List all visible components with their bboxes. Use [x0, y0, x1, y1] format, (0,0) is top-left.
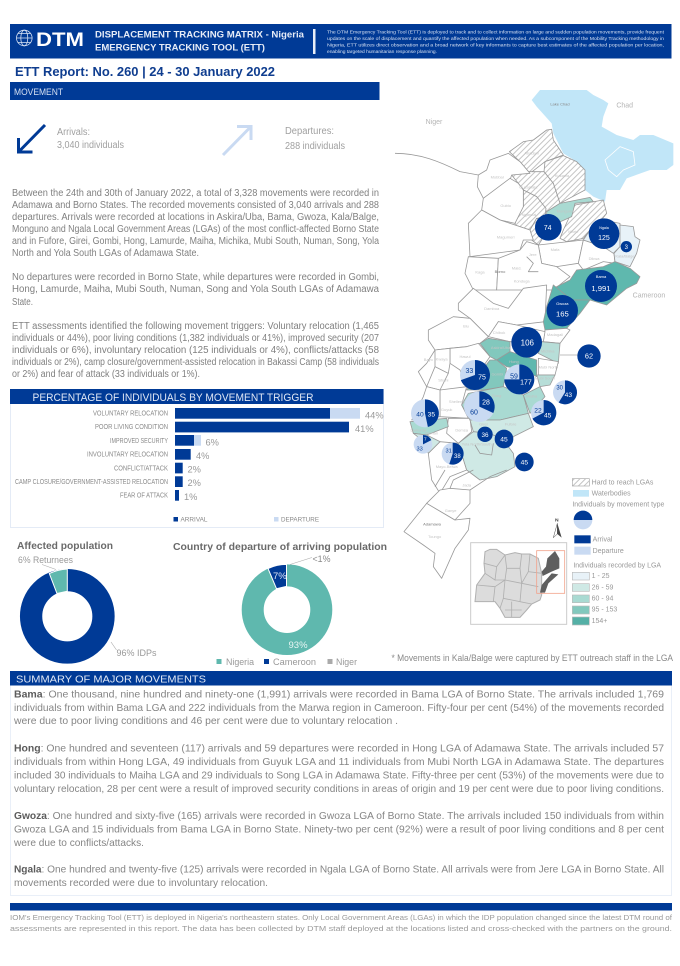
text block: departures: Hong, Lamurde, Maiha, Mubi South, Numan, Song and Yola South LGAs of Adamawa [12, 284, 380, 295]
map legend: Individuals recorded by LGA [573, 563, 661, 570]
map: central and southern LGAs [410, 262, 640, 493]
pie: Gombi [460, 360, 490, 390]
map labels: place names: Niger [426, 119, 443, 126]
panel: country of departure donut: <1% [312, 554, 331, 565]
text block: Hong: voluntary relocation, 28 per cent were a result of improved security conditions in areas of origin and 19 per cent were due to poor living conditions. [14, 784, 664, 795]
map labels: place names: Jada [462, 482, 472, 487]
circle: Girei: 36 [481, 432, 489, 439]
text block: triggers: individuals or 44%), poor living conditions (1,382 individuals or 41%), improved security (207 [12, 333, 379, 344]
pie: Numan: 7 [424, 437, 427, 442]
map labels: place names: Yola North/South [462, 441, 492, 446]
pie: Numan: 33 [417, 447, 423, 453]
circle: Yola South: 45 [521, 460, 528, 467]
text block: Bama: Bama: One thousand, nine hundred and ninety-one (1,991) arrivals were recorded in Bama LGA of Borno State. The arrivals included 1,769 [14, 690, 664, 700]
legend: departure: Departure [593, 548, 624, 555]
legend: LGA classes: 60 - 94 [592, 596, 614, 603]
text block: departures: State. [12, 297, 33, 308]
section bar: movement [10, 82, 380, 100]
circle: Ngala: 125 [598, 235, 610, 242]
panel: summary of major movements [10, 671, 672, 896]
text block: overview: Between the 24th and 30th of January 2022, a total of 3,328 movements were recorded in [12, 188, 379, 199]
pie: Yola: 31 [446, 449, 452, 455]
circle: Ngala [589, 218, 619, 249]
map labels: place names: Kala/Balge [615, 254, 635, 259]
panel: affected population donut: 96% IDPs [116, 648, 157, 659]
text block: Hong: included 30 individuals to Maiha LGA and 29 individuals to Song LGA in Adamawa State. Fifty-three per cent (53%) of the movements were due to [14, 770, 664, 782]
icon: north arrow [553, 518, 562, 538]
legend: LGA classes: 95 - 153 [592, 607, 617, 614]
panel: affected population donut: 6% Returnees [18, 555, 73, 566]
pie: Gombi: 75 [478, 375, 486, 382]
circle: Damasak area 74: 74 [544, 225, 552, 232]
text block: Gwoza: were due to conflicts/attacks. [13, 838, 144, 849]
bar chart: 44% [365, 410, 384, 420]
chart heading: PERCENTAGE OF INDIVIDUALS BY MOVEMENT TRIGGER [32, 392, 314, 404]
pie: Song [464, 391, 495, 422]
text block: overview: Monguno and Ngala Local Government Areas (LGAs) of the most conflict-affected Borno State [12, 224, 379, 235]
icon: IOM logo [16, 30, 32, 46]
map labels: place names: Abadam [524, 150, 540, 155]
map labels: place names: Dikwa [589, 256, 600, 261]
panel: affected population donut: Affected population [17, 541, 113, 552]
pie: Lamurde: 40 [416, 411, 424, 418]
text block: Hong: individuals from within Hong LGA, 49 individuals from Guyuk LGA and 11 individuals from Mubi North LGA in Adamawa State. The departures [14, 757, 664, 768]
map labels: place names: Toungo [428, 534, 442, 539]
bar chart: FEAR OF ATTACK [120, 492, 168, 500]
donut legend: Nigeria [226, 657, 255, 668]
chart heading [10, 389, 384, 404]
header description: Nigeria, ETT utilizes direct observation and a broad network of key informants to capture best estimates of the affected population per location, [327, 42, 664, 48]
map labels: place names: Jere [529, 252, 537, 257]
pie: Hong [504, 364, 534, 394]
bar chart: 4% [196, 451, 209, 461]
circle: Kala/Balge: 3 [625, 245, 629, 251]
map labels: place names: Monguno [557, 209, 574, 214]
header description: The DTM Emergency Tracking Tool (ETT) is deployed to track and to collect information on large and sudden population movements, provide frequent [327, 30, 665, 34]
legend: departure [574, 547, 624, 555]
map labels: place names: Askira/Uba [491, 345, 511, 350]
panel: movement trigger chart [10, 389, 384, 528]
text block: overview: Adamawa and Borno States. The recorded movements consisted of 3,040 arrivals and 288 [12, 200, 380, 211]
circle: Kala/Balge [621, 241, 632, 252]
map: waterbodies and northern Borno [395, 90, 673, 290]
map labels: place names: Mubi North [539, 365, 558, 370]
map labels: place names: Demsa [455, 427, 469, 432]
map labels: place names: Adamawa [423, 521, 442, 526]
bar chart: CONFLICT/ATTACK [114, 466, 168, 472]
map labels: place names: Gombi [491, 371, 503, 376]
header title [95, 30, 305, 54]
footer note [10, 913, 673, 933]
footer note: assessments are represented in this report. The data has been collected by DTM staff deployed at the locations listed and cross-checked with the partners on the ground. [10, 924, 672, 933]
bar chart: POOR LIVING CONDITION [95, 424, 168, 431]
bar chart: 41% [355, 424, 374, 434]
map labels: place names: Fufore [505, 421, 517, 426]
inset map: Nigeria [471, 543, 567, 624]
circle: Girei [477, 427, 493, 442]
map labels: place names: Madagali [547, 332, 563, 337]
DTM wordmark: DTM [36, 30, 84, 51]
bar chart: 2% [188, 464, 201, 474]
bar chart: 1% [184, 492, 197, 502]
map labels: place names: Mobbar [491, 174, 505, 179]
panel: affected population donut [17, 541, 157, 659]
map labels: place names: Chad [616, 102, 633, 109]
map: south Adamawa [404, 470, 507, 578]
legend: LGA classes [572, 572, 617, 625]
text block: overview: and in Fufore, Girei, Gombi, Hong, Lamurde, Maiha, Michika, Mubi South, Numan, Song, Yola [12, 236, 379, 247]
circle: Bama [585, 270, 617, 302]
map labels: place names: Maiha [526, 393, 538, 398]
text block: Bama: individuals from within Bama LGA and 222 individuals from the Marwa region in Cameroon. Fifty-four per cent (54%) of the movements recorded [14, 703, 664, 714]
footer bar [10, 903, 672, 910]
pie: Yola [442, 443, 464, 465]
map labels: place names: Kukawa [555, 173, 570, 178]
map labels: place names: Konduga [514, 278, 530, 283]
pie: Mubi South: 30 [556, 385, 564, 391]
map labels: place names: Kaga [475, 269, 485, 274]
circle: Gwoza: 165 [556, 309, 569, 318]
header description: enabling targeted humanitarian response planning. [327, 49, 437, 54]
map labels: place names: Song [492, 393, 501, 398]
circle: Yola South [515, 453, 534, 471]
legend: hard to reach [572, 479, 654, 486]
map labels: place names: Guzamala [519, 184, 538, 189]
bar chart: VOLUNTARY RELOCATION [93, 410, 168, 418]
map legend: Individuals by movement type [572, 501, 664, 508]
circle: Bama: Bama [596, 274, 607, 279]
map labels: place names: Girei [479, 421, 488, 426]
map labels: place names: Guyuk [441, 407, 452, 412]
map labels: place names: Chibok [493, 330, 505, 335]
map labels: place names: Lamurde [410, 427, 427, 432]
map labels: place names [410, 101, 665, 539]
map labels: place names: Nganzai [522, 212, 536, 217]
header banner [10, 24, 672, 58]
map labels: place names: Hawul [459, 354, 471, 359]
map labels: place names: Cameroon [633, 292, 665, 299]
legend: LGA classes: 1 - 25 [592, 573, 610, 580]
pie: Hong: 59 [510, 374, 518, 381]
circle: Askira/Uba [511, 327, 542, 358]
legend: waterbodies [573, 490, 631, 498]
legend: pie key [574, 511, 592, 529]
icon: departure arrow [223, 126, 251, 155]
circle: Fufore: 45 [500, 437, 508, 444]
map labels: place names: Hong [509, 359, 519, 364]
text block: triggers: individuals or 2%), camp closure/government-assisted relocation in Bakassi Camp (58 individuals [12, 357, 379, 368]
donut legend: Niger [336, 657, 357, 668]
header description: updates on the scale of displacement and quantify the affected population when needed. As a subcomponent of the Mobility Tracking methodology in [327, 36, 665, 41]
section bar: movement: MOVEMENT [14, 87, 63, 98]
circle: Fufore [495, 430, 513, 448]
section bar: summary [10, 671, 672, 686]
circle: Askira/Uba: 106 [521, 339, 535, 348]
legend: LGA classes: 154+ [592, 618, 607, 625]
circle: Michika: 62 [585, 352, 593, 361]
departures figure [285, 126, 345, 152]
text block: triggers: or 2%) and fear of attack (33 individuals or 1%). [12, 369, 200, 380]
text block: Ngala: movements recorded were due to involuntary relocation. [14, 878, 268, 889]
hard to reach LGAs [509, 129, 607, 245]
circle: Bama: 1,991 [591, 284, 611, 293]
text block: Hong [14, 744, 664, 795]
pie: Maiha [531, 400, 556, 425]
map labels: place names: Shani [438, 377, 449, 382]
donut legend [216, 657, 357, 668]
text block: overview: departures. Arrivals were recorded at locations in Askira/Uba, Bama, Gwoza, Kala/Balge, [12, 212, 379, 223]
map: movement circles [411, 214, 632, 471]
text block: overview: North and Yola South LGAs of Adamawa State. [12, 248, 199, 259]
pie: Song: 60 [470, 409, 478, 416]
map labels: place names: Mafa [551, 247, 560, 252]
map labels: place names: Kwaya [436, 357, 448, 362]
text block: overview [12, 188, 380, 259]
text block: Gwoza: Gwoza LGA and 15 individuals from Bama LGA in Borno State. Ninety-two per cent (92%) were a result of poor living conditions and 8 per cent [14, 824, 664, 836]
bar chart: IMPROVED SECURITY [110, 438, 168, 445]
header title: EMERGENCY TRACKING TOOL (ETT) [95, 42, 265, 54]
icon: arrival arrow [18, 125, 45, 152]
circle: Gwoza: Gwoza [556, 301, 569, 306]
report title: ETT Report: No. 260 | 24 - 30 January 2022 [15, 64, 275, 79]
pie: Maiha: 22 [534, 407, 542, 414]
section bar: summary: SUMMARY OF MAJOR MOVEMENTS [16, 674, 206, 686]
map labels: place names: Maid. [512, 265, 522, 270]
map labels: place names: Bayo [424, 357, 434, 362]
map legend [553, 479, 664, 625]
legend: arrival [574, 535, 613, 544]
text block: Ngala [14, 864, 664, 889]
chart legend [174, 516, 320, 524]
panel: country of departure donut: 7% [273, 571, 287, 582]
text block: Gwoza [13, 811, 664, 849]
panel: country of departure donut: Country of departure of arriving population [173, 542, 387, 553]
bar chart: 6% [206, 438, 219, 448]
pie: Yola: 38 [454, 454, 461, 460]
header description [327, 30, 665, 54]
circle: Gwoza [547, 295, 578, 326]
panel: country of departure donut [173, 542, 387, 668]
text block: departures [12, 272, 380, 308]
pie: Mubi South [553, 380, 577, 404]
pie: Numan [414, 435, 432, 454]
pie: Lamurde: 35 [428, 411, 435, 418]
map labels: place names: Mayo-Belwa [436, 464, 458, 469]
map labels: place names: Mubi South [535, 376, 555, 381]
text block: Hong: Hong: One hundred and seventeen (117) arrivals and 59 departures were recorded in Hong LGA of Adamawa State. The arrivals included 57 [14, 744, 664, 754]
arrivals figure: 3,040 individuals [57, 140, 124, 151]
map labels: place names: Borno [495, 269, 506, 274]
pie: Hong: 177 [520, 379, 532, 386]
legend: waterbodies: Waterbodies [592, 491, 631, 498]
text block: Bama: were due to poor living conditions and 46 per cent were due to voluntary relocation . [13, 716, 398, 727]
map labels: place names: Numan [425, 431, 438, 436]
pie: Song: 28 [482, 400, 490, 407]
pie: Lamurde [411, 399, 439, 427]
map labels: place names: Ganye [445, 508, 457, 513]
legend: arrival: Arrival [593, 537, 613, 544]
circle: Damasak area 74 [535, 214, 562, 241]
panel: country of departure donut: 93% [288, 640, 308, 651]
legend: hard to reach: Hard to reach LGAs [592, 479, 654, 486]
bar chart [15, 408, 384, 502]
donut legend: Cameroon [273, 657, 316, 668]
pie: Mubi South: 43 [565, 392, 572, 399]
arrivals figure: Arrivals: [57, 127, 90, 138]
arrivals figure [57, 127, 124, 151]
footer note: IOM's Emergency Tracking Tool (ETT) is deployed in Nigeria's northeastern states. Only Local Government Areas (LGAs) in which the IDP population changed since the latest DTM round of [10, 913, 673, 922]
chart legend: DEPARTURE [281, 516, 320, 524]
map labels: place names: Magumeri [497, 235, 515, 240]
circle: Ngala: Ngala [599, 226, 610, 230]
circle: Michika [560, 344, 601, 368]
departures figure: Departures: [285, 126, 334, 137]
map labels: place names: Marte [568, 229, 579, 234]
pie: Maiha: 45 [544, 412, 552, 419]
pie: Gombi: 33 [465, 368, 473, 375]
text block: triggers: ETT assessments identified the following movement triggers: Voluntary relocation (1,465 [12, 321, 380, 332]
map labels: place names: Gubio [500, 203, 512, 208]
map labels: place names: Damboa [484, 306, 500, 311]
map labels: place names: Shelleng [449, 399, 464, 404]
bar chart: CAMP CLOSURE/GOVERNMENT-ASSISTED RELOCATION [15, 479, 168, 486]
text block: departures: No departures were recorded in Borno State, while departures were recorded in Gombi, [12, 272, 379, 283]
bar chart: INVOLUNTARY RELOCATION [87, 452, 168, 458]
map labels: place names: Michika [541, 348, 555, 353]
departures figure: 288 individuals [285, 141, 345, 152]
map labels: place names: Lake Chad [550, 101, 570, 106]
legend: LGA classes: 26 - 59 [592, 584, 614, 591]
bar chart: 2% [188, 478, 201, 488]
map labels: place names: Biu [463, 324, 469, 329]
chart legend: ARRIVAL [180, 516, 208, 524]
text block: Bama [13, 690, 664, 727]
text block: triggers [12, 321, 380, 380]
text block: triggers: individuals or 6%), involuntary relocation (125 individuals or 4%), conflicts/attacks (58 [12, 345, 380, 356]
icon: north arrow: N [555, 518, 559, 524]
text block: Gwoza: Gwoza: One hundred and sixty-five (165) arrivals were recorded in Gwoza LGA of Borno State. The arrivals included 150 individuals from within [14, 811, 664, 822]
text block: Ngala: Ngala: One hundred and twenty-five (125) arrivals were recorded in Ngala LGA of Borno State. All arrivals were from Jere LGA in Borno State. All [14, 864, 664, 876]
header title: DISPLACEMENT TRACKING MATRIX - Nigeria [95, 30, 305, 40]
